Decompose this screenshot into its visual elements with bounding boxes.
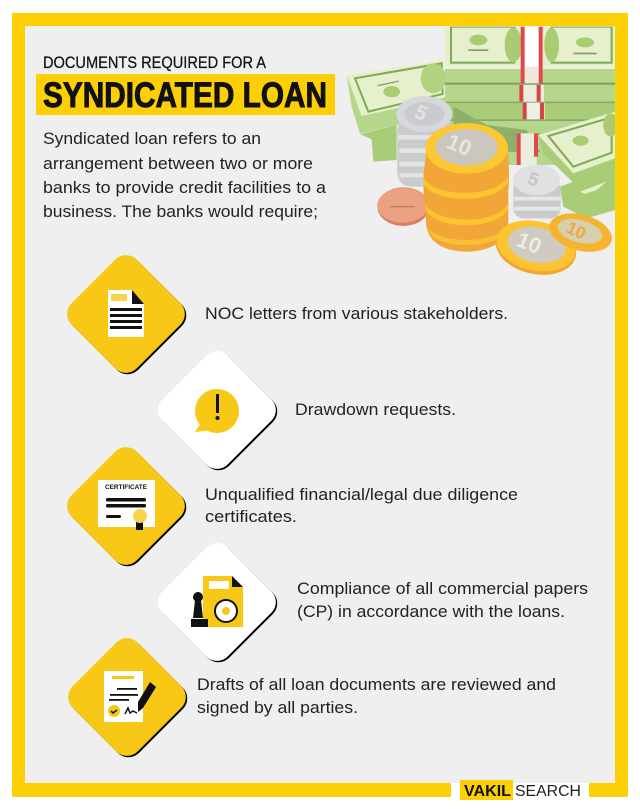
flat gold coins: 10 bbox=[513, 227, 545, 259]
silver coin stack right bbox=[513, 165, 561, 218]
illustration: banknotes and coins bbox=[347, 27, 618, 282]
item 1: yellow diamond with document icon bbox=[61, 249, 192, 380]
item 5 text bbox=[197, 676, 556, 717]
icon: document bbox=[108, 290, 144, 337]
icon: signed document with pen bbox=[104, 671, 156, 722]
silver coin stack left: 5 bbox=[411, 100, 431, 126]
icon: speech bubble with exclamation bbox=[195, 389, 239, 433]
gold coin stack: 10 bbox=[443, 129, 475, 161]
silver coin stack left bbox=[396, 96, 452, 187]
item 5: yellow diamond with signed document icon bbox=[62, 632, 193, 763]
red and white strap bbox=[517, 27, 545, 165]
item 2 text: Drawdown requests. bbox=[295, 401, 456, 419]
item 3 text: Unqualified financial/legal due diligence bbox=[205, 486, 518, 504]
item 5 text: signed by all parties. bbox=[197, 699, 358, 717]
copper coin bbox=[377, 187, 429, 226]
left banknote stack bbox=[347, 60, 446, 162]
icon: stamp and folder bbox=[191, 576, 243, 627]
intro paragraph: Syndicated loan refers to an bbox=[43, 129, 261, 148]
item 4 text: (CP) in accordance with the loans. bbox=[297, 603, 565, 621]
heading: highlighted title: SYNDICATED LOAN bbox=[43, 76, 327, 115]
logo: Vakil Search bbox=[460, 780, 581, 800]
intro paragraph: business. The banks would require; bbox=[43, 202, 318, 221]
gold coin stack bbox=[423, 123, 509, 252]
item 4 text bbox=[297, 580, 588, 621]
item 3: yellow diamond with certificate icon bbox=[61, 441, 192, 572]
item 4 text: Compliance of all commercial papers bbox=[297, 580, 588, 598]
item 3 text: certificates. bbox=[205, 508, 297, 526]
intro paragraph: banks to provide credit facilities to a bbox=[43, 178, 327, 197]
item 1 text: NOC letters from various stakeholders. bbox=[205, 305, 508, 323]
icon: certificate: CERTIFICATE bbox=[105, 485, 147, 491]
heading: small line: DOCUMENTS REQUIRED FOR A bbox=[43, 53, 267, 72]
item 2: white diamond with alert icon bbox=[152, 345, 283, 476]
item 3 text bbox=[205, 486, 518, 526]
item 5 text: Drafts of all loan documents are reviewed and bbox=[197, 676, 556, 694]
flat gold coins bbox=[496, 213, 612, 275]
silver coin stack right: 5 bbox=[525, 167, 542, 191]
intro paragraph: arrangement between two or more bbox=[43, 154, 313, 173]
flat gold coins: 10 bbox=[563, 217, 589, 243]
logo: Vakil Search: SEARCH bbox=[515, 783, 581, 800]
intro paragraph bbox=[43, 129, 327, 221]
item 4: white diamond with stamp icon bbox=[152, 537, 283, 668]
logo: Vakil Search: VAKIL bbox=[464, 783, 511, 800]
top banded banknote stack bbox=[445, 27, 615, 165]
right banknote stack bbox=[538, 112, 618, 218]
